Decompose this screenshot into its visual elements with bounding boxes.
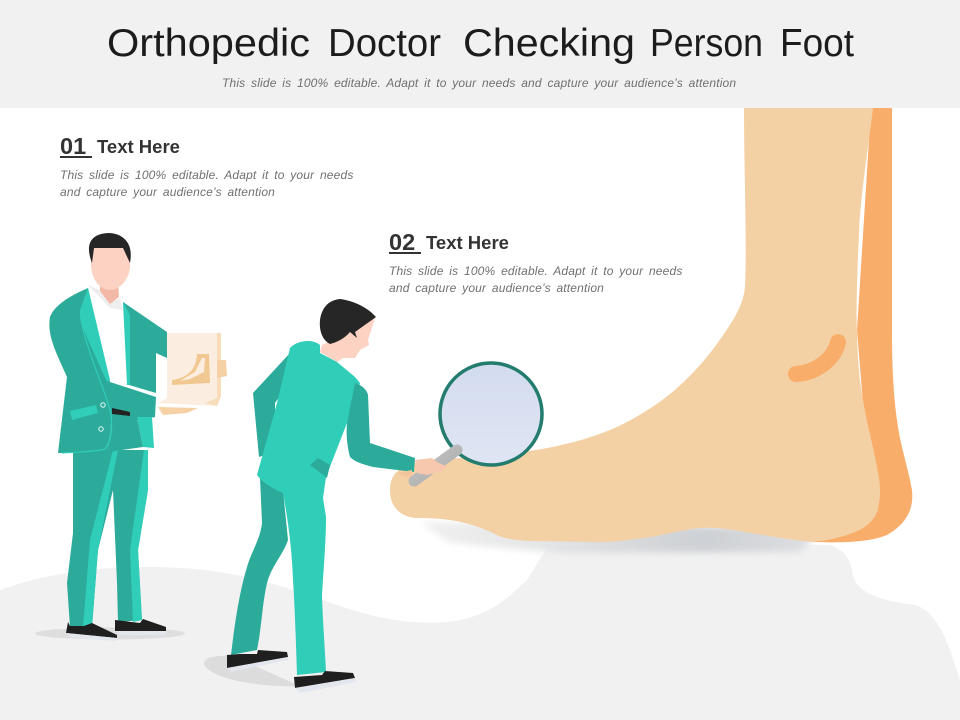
back arm bbox=[253, 353, 290, 457]
hand bbox=[415, 458, 448, 475]
rear leg bbox=[231, 478, 288, 655]
title bbox=[107, 22, 854, 65]
shirt bbox=[88, 285, 129, 388]
hair bbox=[320, 299, 376, 344]
shoes bbox=[66, 622, 117, 638]
hand bbox=[158, 407, 198, 415]
foot x-ray image bbox=[172, 354, 210, 385]
belt bbox=[112, 408, 130, 416]
foot shadow bbox=[420, 522, 825, 553]
description 01: This slide is 100% editable. Adapt it to your needs bbox=[60, 168, 354, 182]
foot body bbox=[390, 108, 880, 542]
title: Foot bbox=[780, 22, 854, 65]
neck bbox=[100, 280, 119, 304]
buttons bbox=[101, 403, 105, 407]
heading 02: Text Here bbox=[426, 232, 509, 253]
pocket bbox=[70, 405, 98, 420]
lens bbox=[440, 363, 542, 465]
handle bbox=[414, 450, 457, 481]
neck and face bbox=[320, 318, 375, 362]
x-ray board bbox=[158, 333, 221, 406]
text block 01 bbox=[60, 133, 354, 199]
pocket bbox=[310, 458, 330, 478]
description 02: This slide is 100% editable. Adapt it to your needs bbox=[389, 264, 683, 278]
ground shadow: examiner bbox=[204, 655, 300, 686]
header band bbox=[0, 0, 960, 108]
face bbox=[91, 246, 130, 290]
jacket bbox=[49, 288, 156, 453]
text block 02 bbox=[389, 229, 683, 295]
hair bbox=[89, 233, 131, 263]
ground shadow: doctor bbox=[35, 628, 185, 640]
title: Orthopedic bbox=[107, 22, 310, 65]
front arm bbox=[347, 383, 415, 472]
figure: doctor with x-ray bbox=[49, 233, 227, 641]
trousers bbox=[67, 450, 148, 627]
foot illustration bbox=[390, 108, 912, 542]
ankle bone mark bbox=[796, 342, 838, 374]
title: Checking bbox=[463, 22, 635, 65]
title: Doctor bbox=[328, 22, 441, 65]
fingertips bbox=[397, 470, 412, 477]
title: Person bbox=[650, 22, 763, 65]
text block 01: and capture your audience’s attention bbox=[60, 185, 275, 199]
subtitle: This slide is 100% editable. Adapt it to your needs and capture your audience’s attention bbox=[222, 76, 736, 90]
fingers bbox=[217, 360, 227, 378]
lapel bbox=[80, 288, 110, 382]
shoes bbox=[227, 650, 288, 668]
torso bbox=[257, 341, 360, 498]
text block 02: and capture your audience’s attention bbox=[389, 281, 604, 295]
number 01: 01 bbox=[60, 133, 86, 159]
number 02: 02 bbox=[389, 229, 415, 255]
heel shade bbox=[800, 108, 912, 542]
figure: examiner with magnifying glass bbox=[227, 299, 542, 693]
heading 01: Text Here bbox=[97, 136, 180, 157]
front leg bbox=[283, 493, 326, 675]
floor shape bbox=[0, 542, 960, 720]
